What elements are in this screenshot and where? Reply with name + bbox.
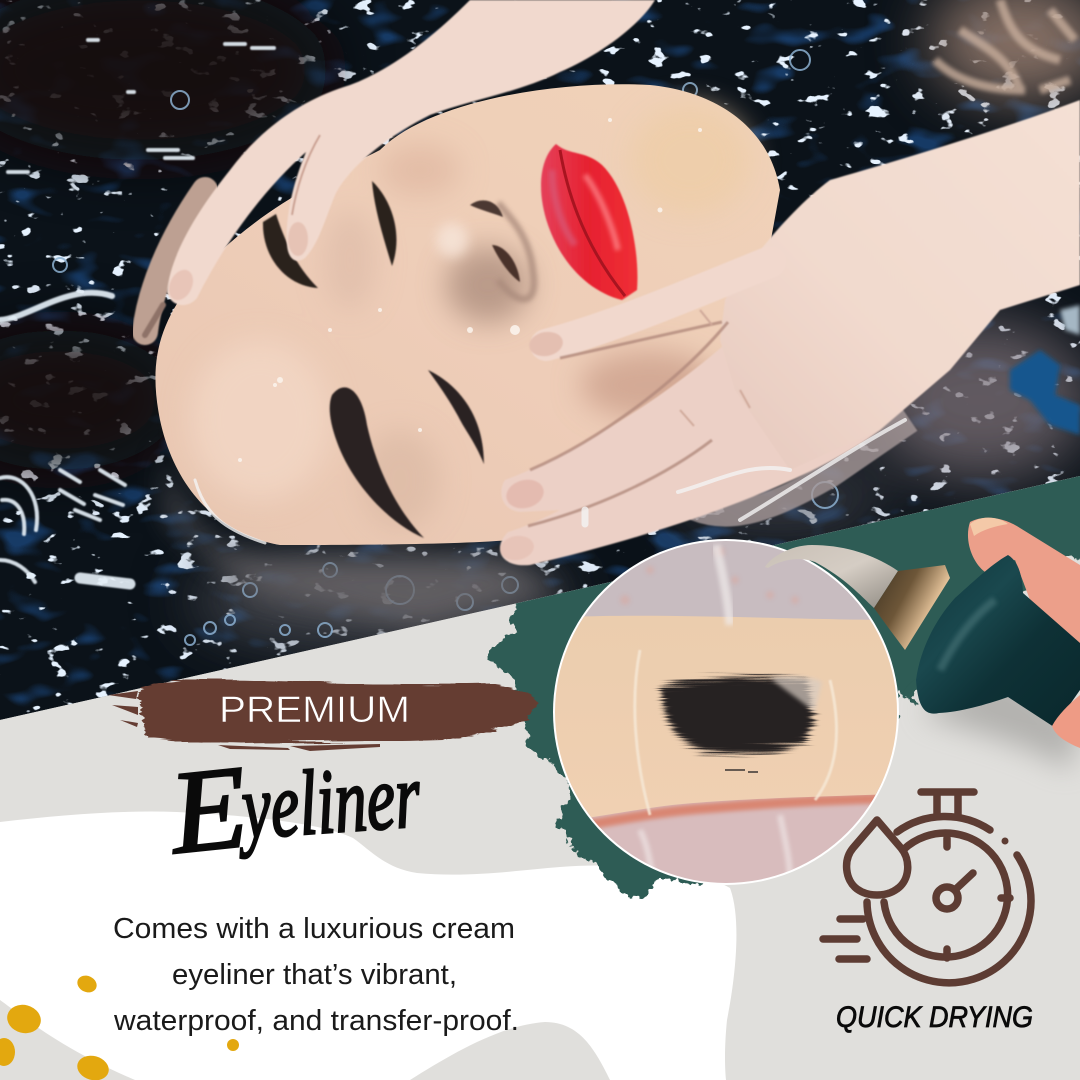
handle highlight xyxy=(940,600,995,670)
hazy water at hairline xyxy=(160,440,560,625)
water noise: white glints xyxy=(0,0,1080,720)
metal tip xyxy=(765,545,898,608)
water noise: blue tones xyxy=(0,0,1080,720)
applicator and fingers xyxy=(765,518,1080,770)
submerged finger xyxy=(145,190,205,332)
water highlights xyxy=(0,40,274,584)
finger nail xyxy=(970,518,1008,536)
eyebrow and lashes, upper xyxy=(263,181,396,288)
photo: woman's face in water xyxy=(0,0,1080,720)
red lips xyxy=(541,144,637,300)
description text xyxy=(113,913,519,1037)
water droplets on face xyxy=(238,118,702,462)
arm xyxy=(555,616,897,822)
red underside of arm xyxy=(555,798,897,830)
face xyxy=(155,84,780,545)
description text: waterproof, and transfer-proof. xyxy=(113,1005,519,1037)
yellow decorative dots xyxy=(0,973,239,1080)
white blob background xyxy=(0,812,736,1080)
water stream xyxy=(716,545,730,625)
blue water patches, lower right xyxy=(1010,305,1080,435)
green brush stroke xyxy=(488,440,1080,900)
light grey lower background xyxy=(0,476,1080,1080)
QUICK DRYING caption: QUICK DRYING xyxy=(836,1001,1033,1034)
lower fingertip xyxy=(1052,695,1080,748)
eyeliner swatch xyxy=(660,676,822,772)
teal handle xyxy=(916,555,1080,727)
left hand on face xyxy=(145,0,655,335)
brown brush banner xyxy=(108,680,537,751)
right hand on face xyxy=(498,100,1080,565)
description text: eyeliner that’s vibrant, xyxy=(172,959,457,991)
Eyeliner script title: yeliner xyxy=(233,744,424,859)
water streak over wrist xyxy=(195,420,905,543)
gold ferrule xyxy=(874,565,950,650)
holographic dots behind arm xyxy=(620,547,799,605)
nose xyxy=(436,200,534,299)
Eyeliner script title xyxy=(162,741,424,879)
eyebrow and lashes, lower xyxy=(330,370,484,538)
sheen on arm xyxy=(635,650,837,815)
grey corner shape, bottom left xyxy=(0,1000,135,1080)
index finger xyxy=(968,518,1080,650)
description text: Comes with a luxurious cream xyxy=(113,913,515,945)
PREMIUM label: PREMIUM xyxy=(219,689,410,730)
grey hill shape, bottom centre xyxy=(410,1022,610,1080)
Eyeliner script title: E xyxy=(162,741,253,879)
dark hair and tonal zones xyxy=(0,0,1080,645)
handle shadow xyxy=(920,670,1080,770)
bubbles xyxy=(53,50,838,665)
tan ripples, upper right xyxy=(935,0,1075,90)
icon: stopwatch with drop xyxy=(823,792,1031,983)
face shading xyxy=(190,105,750,530)
circular photo: water test on arm xyxy=(553,539,899,885)
